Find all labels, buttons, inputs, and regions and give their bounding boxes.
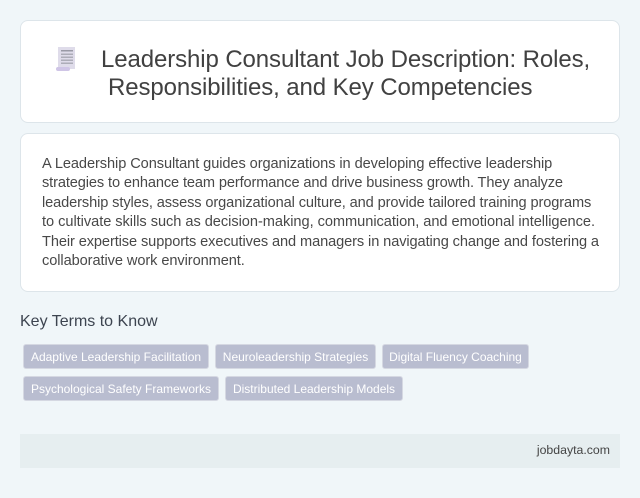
icon: document (56, 47, 75, 71)
panel: description card: collaborative work environment. (42, 253, 245, 269)
panel: description card: A Leadership Consultant guides organizations in developing effective leadership (42, 156, 552, 172)
heading: key terms: Key Terms to Know (20, 313, 158, 330)
tags: key terms (23, 344, 529, 401)
panel: description card: strategies to enhance team performance and drive business growth. They analyze (42, 175, 563, 191)
footer: jobdayta.com (537, 443, 610, 457)
title: Leadership Consultant Job Description: Roles, (101, 46, 590, 73)
title (101, 46, 590, 101)
panel: description card: Their expertise supports executives and managers in navigating change and fostering a (42, 234, 599, 250)
panel: description card (20, 133, 620, 292)
title: Responsibilities, and Key Competencies (108, 74, 532, 101)
panel: description card: leadership styles, assess organizational culture, and provide tailored training programs (42, 195, 591, 211)
panel: title card (20, 20, 620, 123)
tags: key terms: Adaptive Leadership Facilitation (31, 350, 201, 364)
tags: key terms: Distributed Leadership Models (233, 382, 395, 396)
tags: key terms: Neuroleadership Strategies (223, 350, 368, 364)
footer (20, 434, 620, 468)
tags: key terms: Digital Fluency Coaching (389, 350, 522, 364)
tags: key terms: Psychological Safety Frameworks (31, 382, 211, 396)
panel: description card: to cultivate skills such as decision-making, communication, and emotional intelligence. (42, 214, 595, 230)
